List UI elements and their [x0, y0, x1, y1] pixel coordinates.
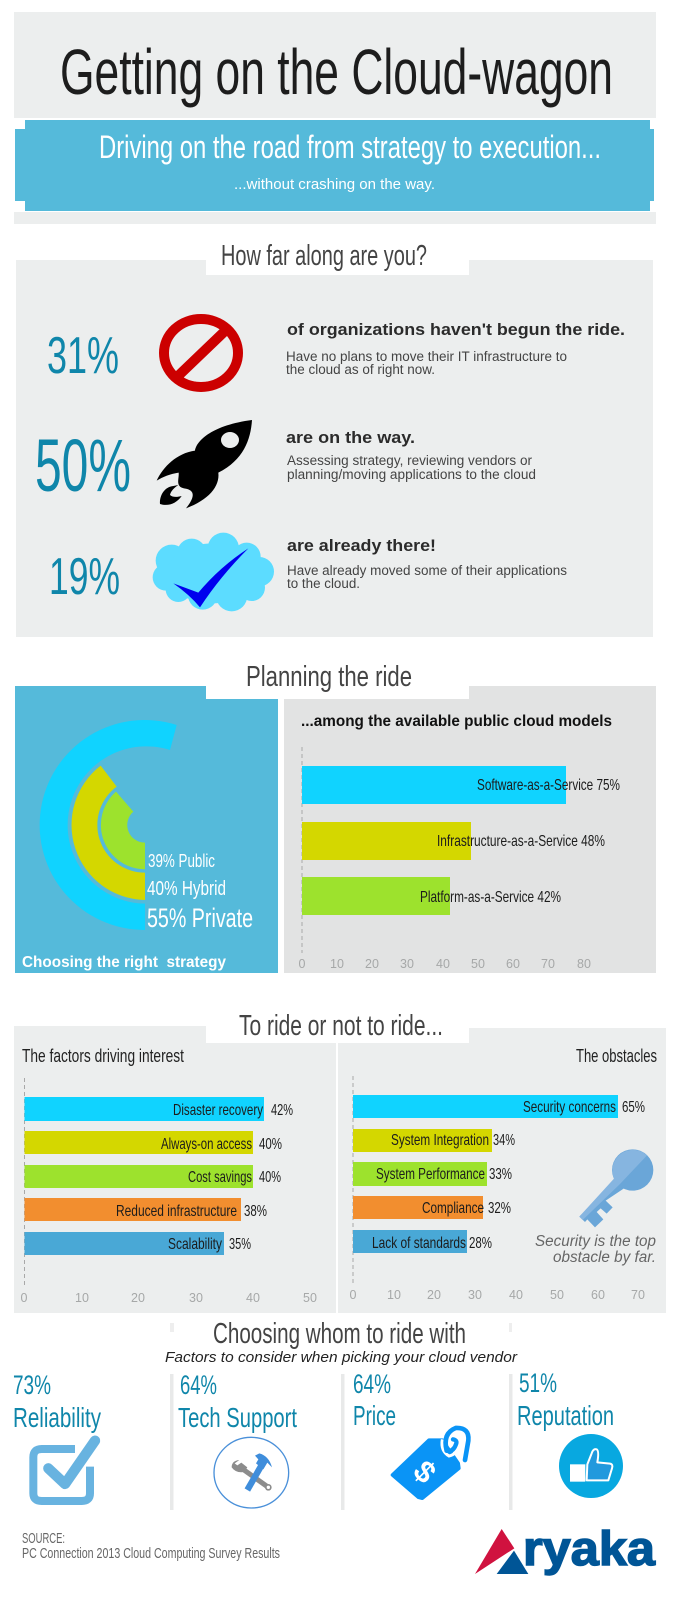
text: not begun — [286, 320, 625, 377]
panel: how far along — [16, 240, 653, 637]
column: price: Price — [353, 1400, 396, 1431]
icon: tools — [214, 1437, 289, 1508]
bar chart: interest: Cost savings — [188, 1169, 252, 1186]
text: on the way — [286, 428, 536, 482]
axis labels: 20 — [365, 957, 379, 971]
column: tech support: 64% — [180, 1370, 217, 1400]
bar chart: obstacles: 65% — [622, 1099, 645, 1116]
column: reputation: Reputation — [517, 1400, 614, 1431]
axis labels: 10 — [75, 1291, 89, 1305]
text: not begun: the cloud as of right now. — [286, 362, 435, 377]
column: tech support: Tech Support — [178, 1402, 297, 1433]
axis labels: 60 — [591, 1288, 605, 1302]
bar chart: obstacles — [353, 1095, 645, 1253]
axis labels: 0 — [299, 957, 306, 971]
bar chart: cloud models: Infrastructure-as-a-Service 48% — [437, 833, 605, 850]
panel: factors driving interest — [14, 1026, 336, 1313]
source: SOURCE: — [22, 1530, 65, 1547]
heading: choosing whom to ride with: Choosing whom to ride with — [213, 1318, 466, 1350]
panel caption: Choosing the right strategy — [22, 954, 226, 971]
icon: rocket — [157, 420, 252, 508]
axis labels — [299, 957, 591, 971]
icon: price tag: $ — [406, 1454, 443, 1490]
bar chart: cloud models — [302, 766, 620, 915]
bar chart: obstacles: 28% — [469, 1235, 492, 1252]
panel heading: ...among the available public cloud models — [301, 713, 612, 730]
callout: security: Security is the top — [535, 1233, 656, 1250]
axis labels: 70 — [631, 1288, 645, 1302]
heading: how far along: How far along are you? — [221, 240, 427, 272]
axis labels: 20 — [427, 1288, 441, 1302]
text: already there: to the cloud. — [287, 576, 360, 591]
column: price — [353, 1369, 468, 1498]
axis labels: 50 — [471, 957, 485, 971]
text: already there — [287, 536, 567, 591]
bar chart: interest: 40% — [259, 1136, 282, 1153]
text: not begun: of organizations haven't begun the ride. — [287, 320, 625, 339]
icon: no entry sign — [164, 319, 238, 387]
icon: cloud with check — [153, 533, 274, 611]
heading: planning the ride: Planning the ride — [246, 661, 412, 693]
stat: 31%: 31% — [47, 327, 119, 385]
icon: thumbs up — [559, 1434, 623, 1498]
axis labels: 60 — [506, 957, 520, 971]
source — [22, 1530, 280, 1562]
bar chart: interest: Disaster recovery — [173, 1102, 263, 1119]
axis labels: 50 — [550, 1288, 564, 1302]
subtitle banner: ...without crashing on the way. — [234, 176, 435, 193]
stat: 19%: 19% — [49, 548, 120, 606]
radial chart — [40, 720, 177, 930]
bar chart: obstacles: System Integration — [391, 1132, 489, 1149]
axis labels: 30 — [400, 957, 414, 971]
column: reputation: 51% — [519, 1368, 557, 1398]
icon: key — [579, 1149, 653, 1227]
bar chart: obstacles: Lack of standards — [372, 1235, 466, 1252]
bar chart: interest — [24, 1097, 293, 1255]
panel: the obstacles — [338, 1028, 666, 1313]
bar chart: interest: 35% — [229, 1236, 251, 1253]
panel: choosing the right strategy — [15, 686, 278, 973]
panel heading: The factors driving interest — [22, 1046, 184, 1066]
source: PC Connection 2013 Cloud Computing Survey Results — [22, 1545, 280, 1562]
chart labels: 40% Hybrid — [147, 878, 226, 900]
bar chart: obstacles: 33% — [489, 1166, 512, 1183]
axis labels: 30 — [468, 1288, 482, 1302]
axis labels: 0 — [21, 1291, 28, 1305]
text: already there: are already there! — [287, 536, 436, 555]
axis labels — [350, 1288, 645, 1302]
axis labels: 70 — [541, 957, 555, 971]
subheading: factors: Factors to consider when picking your cloud vendor — [165, 1350, 518, 1366]
axis labels: 40 — [436, 957, 450, 971]
column: reliability — [13, 1370, 101, 1501]
bar chart: interest: Reduced infrastructure — [116, 1203, 237, 1220]
axis labels: 50 — [303, 1291, 317, 1305]
column: reliability: 73% — [13, 1370, 51, 1400]
axis labels: 10 — [330, 957, 344, 971]
text: already there: Have already moved some of their applications — [287, 563, 567, 578]
axis labels: 30 — [189, 1291, 203, 1305]
chart labels: 39% Public — [148, 851, 215, 871]
logo: aryaka — [475, 1523, 655, 1576]
bar chart: interest: 40% — [259, 1169, 281, 1186]
stat: 50%: 50% — [35, 424, 131, 507]
column: reputation — [517, 1368, 623, 1498]
text: on the way: Assessing strategy, reviewing vendors or — [287, 453, 533, 468]
bar chart: obstacles: 32% — [488, 1200, 511, 1217]
bar chart: interest: 42% — [271, 1102, 293, 1119]
axis labels — [21, 1291, 317, 1305]
text: on the way: planning/moving applications to the cloud — [287, 467, 536, 482]
callout: security — [535, 1233, 656, 1266]
text: on the way: are on the way. — [286, 428, 415, 447]
chart labels — [147, 851, 253, 933]
bar chart: obstacles: Security concerns — [523, 1099, 616, 1116]
axis labels: 80 — [577, 957, 591, 971]
logo: aryaka: ryaka — [523, 1523, 655, 1576]
panel: public cloud models — [284, 686, 656, 973]
axis labels: 10 — [387, 1288, 401, 1302]
subtitle banner — [15, 120, 654, 211]
header panel — [14, 12, 656, 224]
icon: checkbox — [33, 1441, 95, 1501]
bar chart: cloud models: Platform-as-a-Service 42% — [420, 889, 561, 906]
bar chart: interest: Always-on access — [161, 1136, 252, 1153]
chart labels: 55% Private — [147, 903, 253, 933]
heading: to ride or not: To ride or not to ride... — [239, 1010, 443, 1042]
bar chart: interest: Scalability — [168, 1236, 222, 1253]
axis labels: 40 — [246, 1291, 260, 1305]
axis labels: 40 — [509, 1288, 523, 1302]
column: reliability: Reliability — [13, 1402, 101, 1433]
text: not begun: Have no plans to move their IT infrastructure to — [286, 349, 567, 364]
column: price: 64% — [353, 1369, 391, 1399]
axis labels: 0 — [350, 1288, 357, 1302]
bar chart: obstacles: System Performance — [376, 1166, 485, 1183]
bar chart: obstacles: 34% — [493, 1132, 515, 1149]
bar chart: cloud models: Software-as-a-Service 75% — [477, 777, 620, 794]
column: tech support — [178, 1370, 297, 1508]
bar chart: obstacles: Compliance — [422, 1200, 484, 1217]
axis labels: 20 — [131, 1291, 145, 1305]
bar chart: interest: 38% — [244, 1203, 267, 1220]
callout: security: obstacle by far. — [553, 1249, 656, 1266]
